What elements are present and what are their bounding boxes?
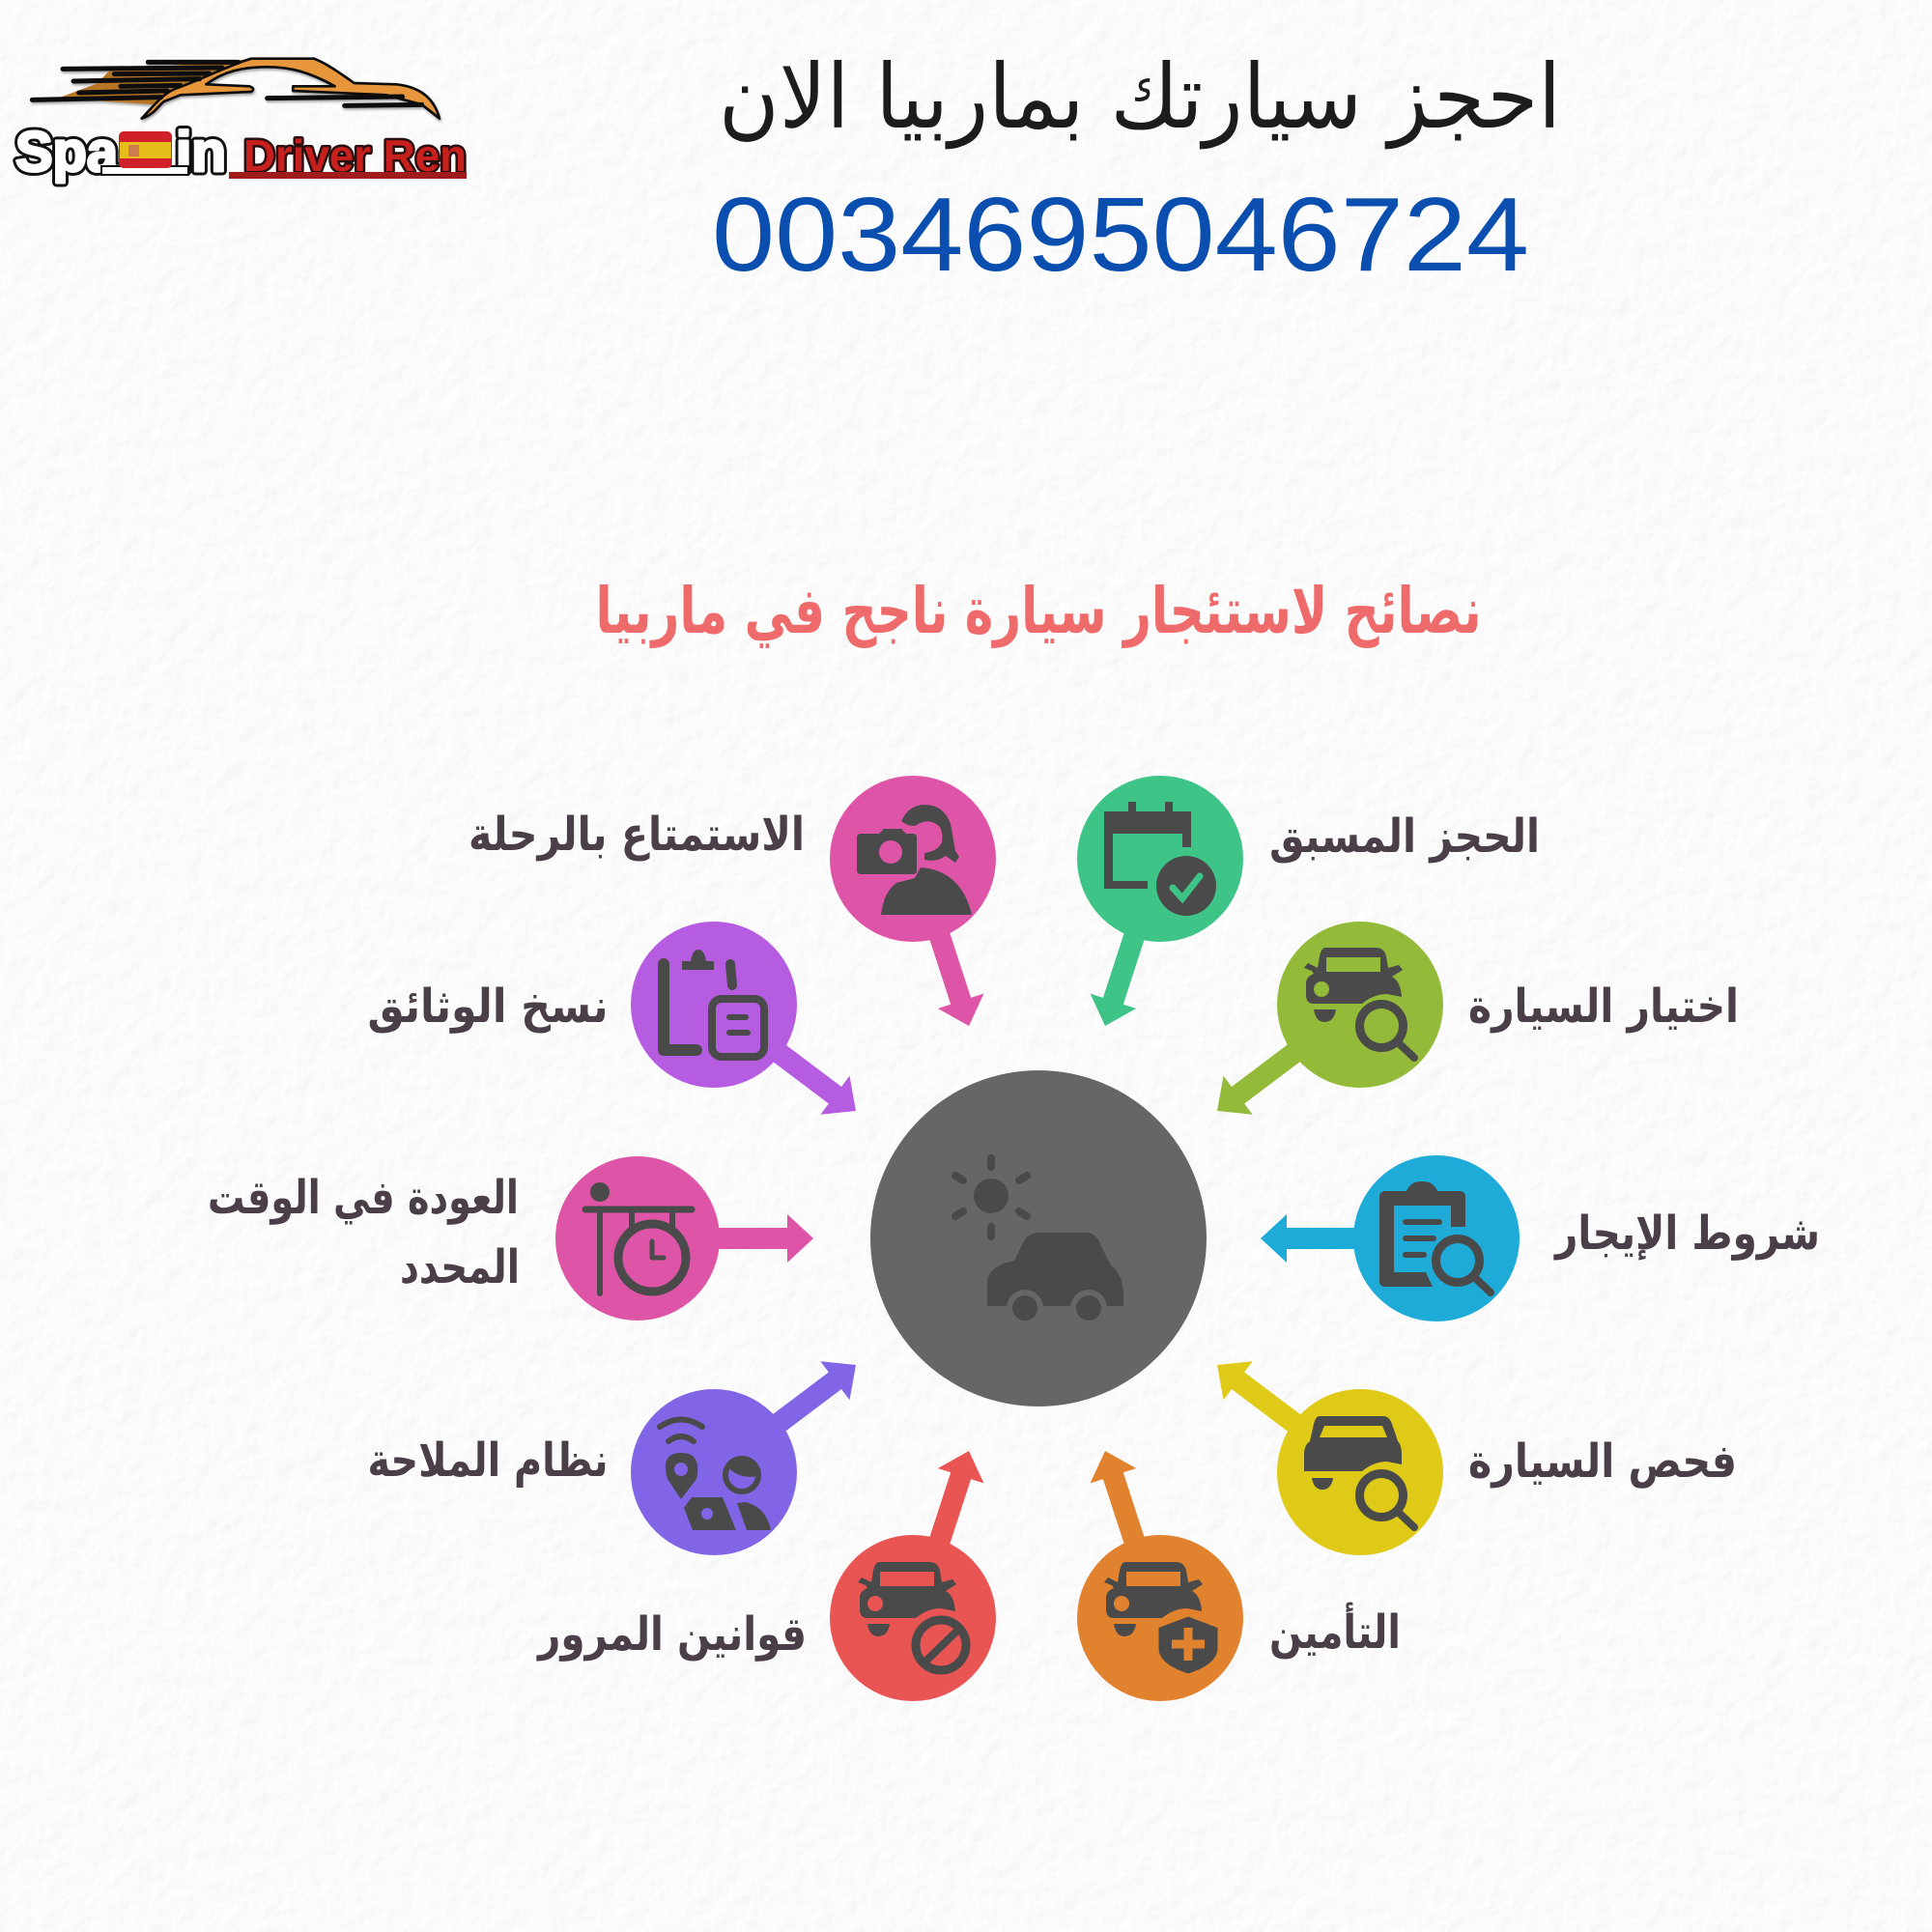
arrow [1261,1214,1386,1263]
logo wordmark Spain: Spa [15,121,119,184]
headline: احجز سيارتك بماربيا الان [719,45,1561,150]
icon: clipboard and document [664,950,764,1057]
circle [1077,1535,1243,1701]
label: نسخ الوثائق [367,980,609,1034]
logo wordmark Driver Ren: Driver Ren [243,130,467,181]
icon: car with prohibition sign [858,1562,966,1670]
item: traffic laws (red) [536,1443,996,1701]
circle [1277,922,1443,1088]
label: نظام الملاحة [367,1434,609,1488]
label: فحص السيارة [1468,1435,1737,1489]
icon: person with camera [857,805,972,915]
circle [631,922,797,1088]
logo wordmark Spain: Spa [15,121,119,184]
item: returning on time (magenta) [208,1156,813,1321]
item: choosing the car (lime) [1203,922,1739,1130]
item: enjoying the trip (pink) [469,776,996,1034]
logo wordmark Spain: in [176,121,226,184]
center circle with sun and car [870,1070,1207,1406]
logo wordmark Driver Ren: Driver Ren [243,130,467,181]
icon: car with shield [1104,1562,1219,1675]
circle [1077,776,1243,942]
item: copying documents (purple) [367,922,870,1130]
arrow [741,1346,870,1460]
phone number: 0034695046724 [712,176,1529,294]
logo [15,59,467,184]
arrow [907,1443,992,1577]
icon: clipboard with magnifier [1379,1181,1491,1293]
item: inspecting the car (yellow) [1203,1346,1737,1555]
label: الحجز المسبق [1269,810,1540,864]
logo wordmark Spain [15,121,226,184]
icon: car with magnifier [1304,948,1414,1058]
circle [1277,1389,1443,1555]
logo car swoosh [32,59,440,119]
circle [830,776,996,942]
label: اختيار السيارة [1468,980,1739,1034]
label: شروط الإيجار [1553,1207,1820,1261]
item: rental terms (blue) [1261,1155,1820,1321]
arrow [1082,1443,1167,1577]
logo wordmark Spain: in [176,121,226,184]
label: العودة في الوقت [208,1171,519,1225]
circle [1353,1155,1520,1321]
circle [830,1535,996,1701]
label [208,1171,520,1294]
arrow [1203,1016,1332,1130]
icon: wifi, pin, person and map [660,1420,771,1530]
arrow [1082,899,1167,1034]
arrow [741,1016,870,1130]
arrow [1203,1346,1332,1460]
item: insurance (orange) [1077,1443,1401,1701]
icon: hanging clock sign [585,1182,692,1293]
arrow [907,899,992,1034]
label: الاستمتاع بالرحلة [469,808,805,862]
title: نصائح لاستئجار سيارة ناجح في ماربيا [595,574,1482,648]
arrow [688,1214,813,1263]
item: navigation system (violet) [367,1346,870,1555]
icon: calendar check [1104,802,1216,916]
circle [631,1389,797,1555]
item: early booking (green) [1077,776,1540,1034]
label: التأمين [1269,1602,1401,1660]
circle [555,1156,720,1321]
icon: car with magnifier [1304,1416,1414,1527]
label: المحدد [400,1240,520,1294]
label: قوانين المرور [536,1607,807,1662]
